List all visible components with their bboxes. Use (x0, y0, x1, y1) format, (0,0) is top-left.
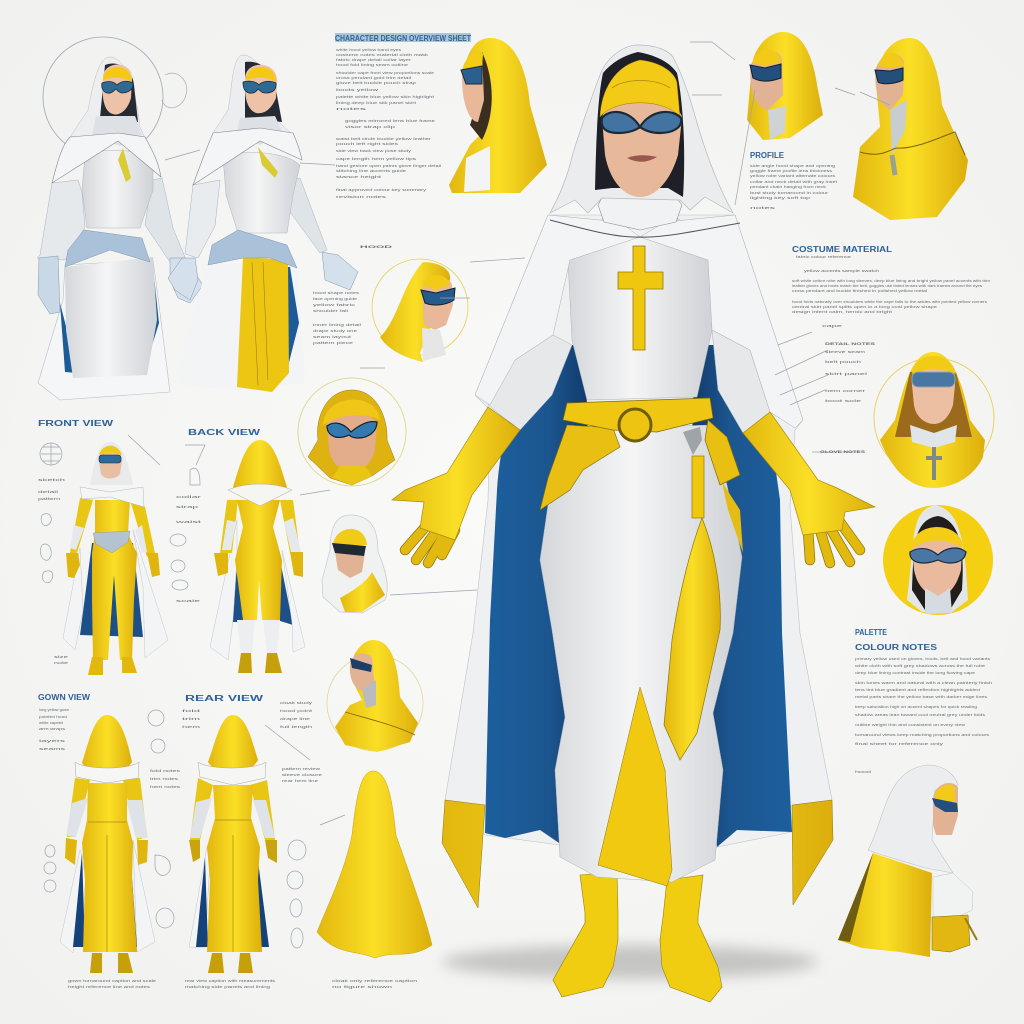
yellow headband (600, 60, 680, 117)
text block: top right small: bust study turnaround in colour (750, 190, 829, 195)
text block: lower-left labels: gown turnaround caption and scale (68, 978, 157, 983)
text block: right upper: GLOVE NOTES (820, 449, 865, 454)
text block: mid-left labels: hood shape notes (313, 290, 359, 295)
text block: top centre (335, 33, 471, 199)
text block: mid-left labels: drape study one (313, 328, 358, 333)
text block: mid-left labels: inner lining detail (313, 322, 361, 327)
text block: top centre: cape length hem yellow tips (336, 156, 416, 161)
text block: mid-left labels: sketch (38, 477, 65, 482)
cape white back (445, 215, 832, 847)
left sleeve (488, 335, 572, 430)
text block: lower-left labels: seams (39, 746, 65, 751)
text block: lower-left labels: trim (182, 716, 202, 721)
text block: right upper: belt pouch (825, 359, 861, 364)
right sleeve (712, 330, 770, 433)
capelet edge line (550, 220, 740, 237)
text block: mid-left labels: note (54, 660, 69, 665)
text block: right lower: lens tint blue gradient and reflection highlights added (855, 687, 980, 692)
text block: top centre: cross pendant gold trim detail (336, 75, 411, 80)
figure C: yellow front view (63, 442, 168, 675)
text block: top centre: goggles mirrored lens blue frame (345, 118, 436, 123)
text block: mid-left labels: seam layout (313, 334, 353, 339)
text block: top centre: palette white blue yellow skin highlight (336, 94, 435, 99)
text block: mid-left labels: waist (176, 519, 203, 524)
text block: right upper: soft white cotton robe with long sleeves, deep blue lining and bright yellow panel accents with trim (792, 278, 991, 283)
text block: lower-left labels: sleeve closure (282, 772, 323, 777)
text block: mid-left labels: FRONT VIEW (38, 419, 114, 428)
main figure (392, 45, 875, 1002)
text block: right lower: COLOUR NOTES (855, 643, 938, 652)
text block: lower-left labels: no figure shown (332, 984, 392, 989)
hood outer (550, 45, 733, 213)
text block: top centre: boots yellow (336, 87, 378, 92)
text block: top centre: waist belt circle buckle yellow leather (336, 136, 432, 141)
text block: top right small: notes (750, 205, 775, 210)
right glove (743, 412, 875, 535)
text block: lower-left labels: layers (39, 738, 65, 743)
right hand fingers (808, 522, 860, 563)
portrait: yellow helmet circle (298, 378, 406, 486)
text block: right lower: deep blue lining contrast inside the long flowing cape (855, 670, 976, 675)
text block: right upper: cross pendant and buckle finished in polished yellow metal (792, 288, 927, 293)
headband highlight (612, 80, 670, 88)
text block: top right small: collar and neck detail with gray inset (750, 179, 838, 184)
text block: top right small: PROFILE (750, 151, 785, 160)
text block: mid-left labels: collar (176, 494, 203, 499)
portrait: yellow hood left round (372, 259, 468, 362)
text block: right upper: leather gloves and boots match the belt, goggles use tinted lenses with dark frames around the eyes (792, 283, 982, 288)
skirt yellow lower panel (598, 687, 672, 886)
yellow belt (563, 398, 713, 432)
text block: right lower: PALETTE (855, 628, 888, 637)
text block: lower-left labels: GOWN VIEW (38, 693, 90, 702)
text block: right lower: shadow areas lean toward cool neutral grey under folds (855, 712, 985, 717)
text block: right lower: metal parts share the yellow base with darker edge lines (855, 694, 987, 699)
text block: right upper: sleeve seam (825, 349, 866, 354)
callout lines (128, 42, 890, 825)
text block: mid-left labels: face opening guide (313, 296, 358, 301)
cape shoulder right (640, 215, 803, 428)
portrait: solid yellow circle (883, 505, 993, 615)
text block: top centre: side view back view pose study (336, 148, 411, 153)
portrait: top side view yellow hood (449, 38, 547, 193)
text block: lower-left labels: rear hem line (282, 778, 319, 783)
skirt white (540, 425, 742, 882)
belt hanging strap (692, 456, 704, 518)
cape blue lining right (690, 345, 792, 847)
text block: lower-left labels: REAR VIEW (185, 694, 264, 703)
text block: lower-left labels: drape line (280, 716, 311, 721)
text block: lower-left labels: fold (182, 708, 200, 713)
cape blue lining left (485, 345, 590, 845)
text block: lower-left labels: hem notes (150, 784, 180, 789)
text block: right lower (855, 628, 992, 774)
text block: top centre: pouch left right sides (336, 141, 398, 146)
text block: top centre: notes (336, 106, 366, 111)
portrait: top right bust (853, 38, 968, 220)
text block: lower-left labels: matching side panels and lining (185, 984, 270, 989)
text block: lower-left labels: height reference line and notes (68, 984, 150, 989)
sketch icons (40, 443, 306, 948)
text block: right lower: primary yellow used on gloves, boots, belt and hood variants (855, 656, 990, 661)
belt buckle (619, 409, 651, 441)
text block: top right small: goggle frame profile lens thickness (750, 168, 832, 173)
text block: right upper: hem corner (825, 388, 866, 393)
text block: top centre: revision notes (336, 194, 386, 199)
text block: right lower: white cloth with soft grey shadows across the full robe (855, 663, 986, 668)
text block: top right small: pendant chain hanging from neck (750, 184, 826, 189)
text block: top centre: glove belt buckle pouch strap (336, 80, 417, 85)
figure B: white costume with yellow panel (168, 55, 358, 392)
text block: mid-left labels: BACK VIEW (188, 428, 261, 437)
text block: right upper (792, 245, 991, 454)
torso (567, 215, 712, 400)
figure F: yellow gown back view variant (189, 715, 277, 973)
text block: lower-left labels: long yellow gown (39, 707, 69, 712)
text block: top centre: lining deep blue silk panel skirt (336, 100, 417, 105)
text block: mid-left labels (38, 244, 392, 665)
face (602, 101, 682, 197)
text block: lower-left labels: arm wraps (39, 726, 65, 731)
text block: top centre: hand gesture open palms glove finger detail (336, 163, 441, 168)
cape yellow tips (442, 800, 833, 908)
left glove (392, 407, 520, 540)
figure E: yellow gown back view (60, 715, 155, 973)
text block: lower-left labels: pattern review (282, 766, 320, 771)
portrait: circle yellow hood front right (874, 352, 994, 488)
text block: right upper: boot sole (825, 398, 863, 403)
text block: top centre: final approved colour key summary (336, 187, 426, 192)
hip yellow edge strip (722, 482, 743, 553)
text block: right upper: DETAIL NOTES (825, 341, 876, 346)
text block: mid-left labels: shoulder fall (313, 308, 348, 313)
cape shoulder left (475, 215, 640, 405)
text block: top centre: shoulder cape front view proportions scale (336, 70, 435, 75)
text block: lower-left labels: hood point (280, 708, 314, 713)
figure G: yellow cloak (317, 771, 432, 958)
portrait: top right side head (747, 32, 823, 140)
collar (598, 183, 682, 230)
text block: lower-left labels: fold notes (150, 768, 180, 773)
text block: top right small: lighting key soft top (750, 195, 811, 200)
text block: right upper: skirt panel (825, 371, 867, 376)
left boot (553, 872, 618, 997)
text block: lower-left labels: white capelet (39, 720, 64, 725)
text block: top right small: yellow robe variant alternate colours (750, 173, 835, 178)
text block: right upper: design intent calm, heroic and bright (792, 309, 893, 314)
text block: lower-left labels: hem (182, 724, 202, 729)
hood dark interior (595, 52, 684, 197)
text block: lower-left labels (38, 693, 417, 989)
portrait: yellow hood side turned (327, 640, 423, 752)
text block: top centre: costume notes material cloth mask (336, 52, 428, 57)
figure A: white costume front view (37, 37, 203, 400)
text block: mid-left labels: pattern piece (313, 340, 354, 345)
text block: right lower: keep saturation high on accent shapes for quick reading (855, 704, 977, 709)
text block: lower-left labels: full length (280, 724, 312, 729)
figure D: yellow back view (210, 440, 305, 673)
goggles (602, 112, 681, 133)
text block: top right small: side angle hood shape and opening (750, 163, 835, 168)
text block: top centre: white hood yellow band eyes (336, 47, 401, 52)
text block: mid-left labels: scale (176, 598, 202, 603)
text block: top centre: hood fold lining seam outline (336, 62, 409, 67)
text block: top centre: stance height (336, 174, 383, 179)
mouth (627, 155, 657, 162)
text block: right lower: outline weight thin and consistent on every view (855, 722, 965, 727)
text block: right lower: final sheet for reference only (855, 741, 943, 746)
text block: right lower: turnaround views keep matching proportions and colours (855, 732, 989, 737)
right boot (660, 875, 722, 1002)
left hand fingers (405, 525, 455, 563)
text block: right upper: central skirt panel splits open in a long oval yellow shape (792, 304, 938, 309)
text block: right upper: fabric colour reference (796, 254, 852, 259)
text block: mid-left labels: HOOD (360, 244, 392, 249)
text block: lower-left labels: rear view caption with measurements (185, 978, 275, 983)
text block: top centre: visor strap clip (345, 124, 397, 129)
text block: mid-left labels: pattern (38, 496, 60, 501)
portrait: bottom right white hood with yellow cape (838, 765, 977, 957)
yellow sash (540, 425, 620, 510)
text block: right upper: COSTUME MATERIAL (792, 245, 892, 254)
text block: top centre: stitching line accents guide (336, 168, 407, 173)
text block: mid-left labels: strap (176, 504, 200, 509)
silver clasp (683, 427, 702, 455)
text block: right upper: yellow accents sample swatch (804, 268, 879, 273)
text block: top centre: fabric drape detail collar layer (336, 57, 412, 62)
text block: top centre: CHARACTER DESIGN OVERVIEW SHEET (335, 34, 471, 43)
text block: lower-left labels: pointed hood (39, 714, 67, 719)
text block: mid-left labels: yellow fabric (313, 302, 355, 307)
text block: mid-left labels: detail (38, 489, 58, 494)
text block: right upper: cape (822, 323, 844, 328)
text block: right lower: skin tones warm and natural with a clean painterly finish (855, 680, 992, 685)
skirt yellow oval panel (664, 518, 720, 760)
text block: mid-left labels: size (54, 654, 70, 659)
belt pouch (705, 420, 740, 485)
text block: right lower: hood (855, 769, 871, 774)
text block: lower-left labels: trim notes (150, 776, 178, 781)
text block: right upper: hood folds naturally over shoulders while the cape falls to the ankles with pointed yellow corners (792, 299, 987, 304)
text block: top right small (750, 151, 838, 210)
text block: lower-left labels: cloak study (280, 700, 312, 705)
portrait: white hood round (322, 515, 387, 613)
yellow cross (618, 246, 663, 350)
text block: lower-left labels: cloak only reference caption (332, 978, 417, 983)
ground shadow (442, 945, 818, 979)
